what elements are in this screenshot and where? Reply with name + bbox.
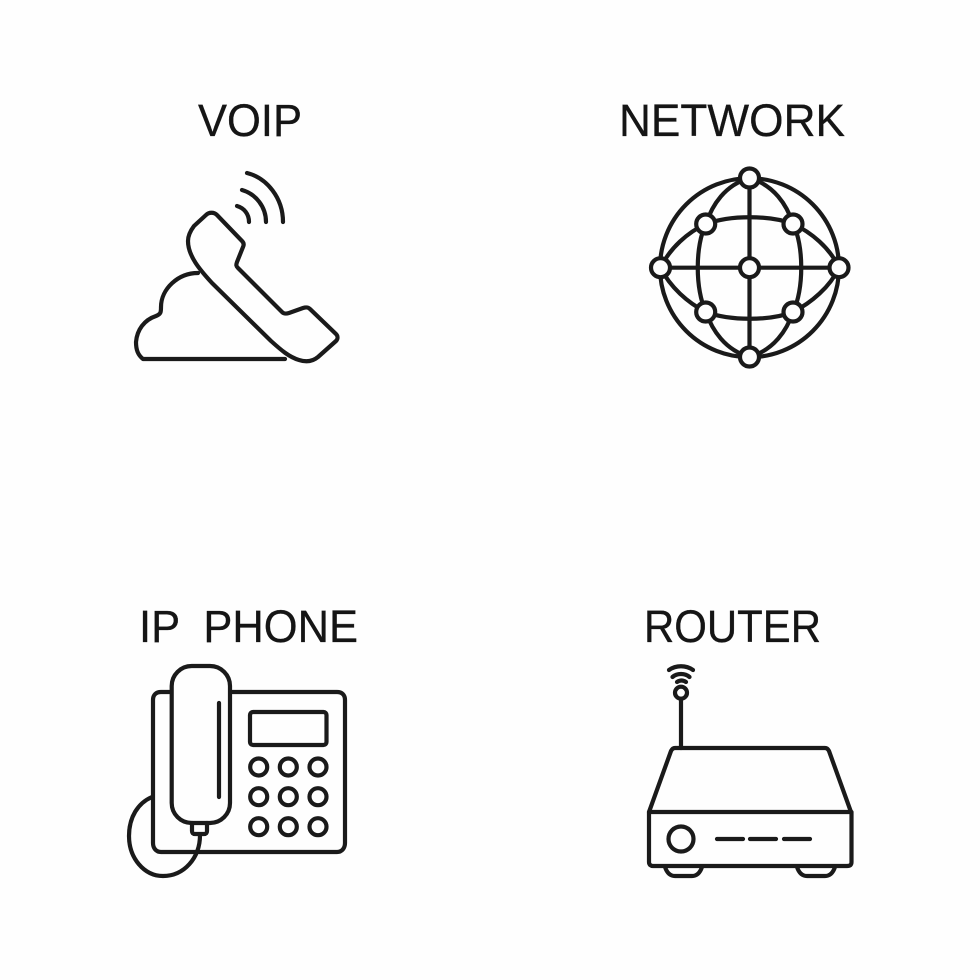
- icon: router: [649, 666, 852, 876]
- icon: handset: [188, 213, 338, 361]
- antenna: [679, 699, 683, 748]
- phone screen: [250, 712, 326, 745]
- keypad: [250, 758, 326, 835]
- globe lines: [660, 178, 839, 357]
- panel: VOIP: [136, 95, 338, 361]
- icon: signal waves: [237, 173, 283, 222]
- router feet: [665, 867, 835, 876]
- router front: [649, 812, 852, 866]
- network nodes: [651, 168, 848, 366]
- panel: NETWORK: [619, 95, 848, 366]
- panel: ROUTER: [644, 601, 852, 876]
- phone cord: [129, 797, 200, 876]
- icon: globe network: [651, 168, 848, 366]
- icon: cloud and telephone handset: [136, 173, 338, 361]
- phone body: [153, 692, 345, 852]
- wifi waves: [669, 666, 693, 682]
- heading: NETWORK: NETWORK: [619, 95, 845, 146]
- panel: IP PHONE: [129, 601, 358, 876]
- heading: IP PHONE: IP PHONE: [139, 601, 358, 652]
- front knob: [668, 826, 694, 852]
- icon: desk phone: [129, 666, 345, 876]
- heading: VOIP: VOIP: [198, 95, 302, 146]
- icon: cloud: [136, 273, 285, 359]
- indicator dashes: [717, 837, 810, 841]
- heading: ROUTER: ROUTER: [644, 601, 821, 652]
- phone handset: [172, 666, 230, 823]
- router top: [649, 748, 851, 812]
- handset connector: [192, 823, 207, 834]
